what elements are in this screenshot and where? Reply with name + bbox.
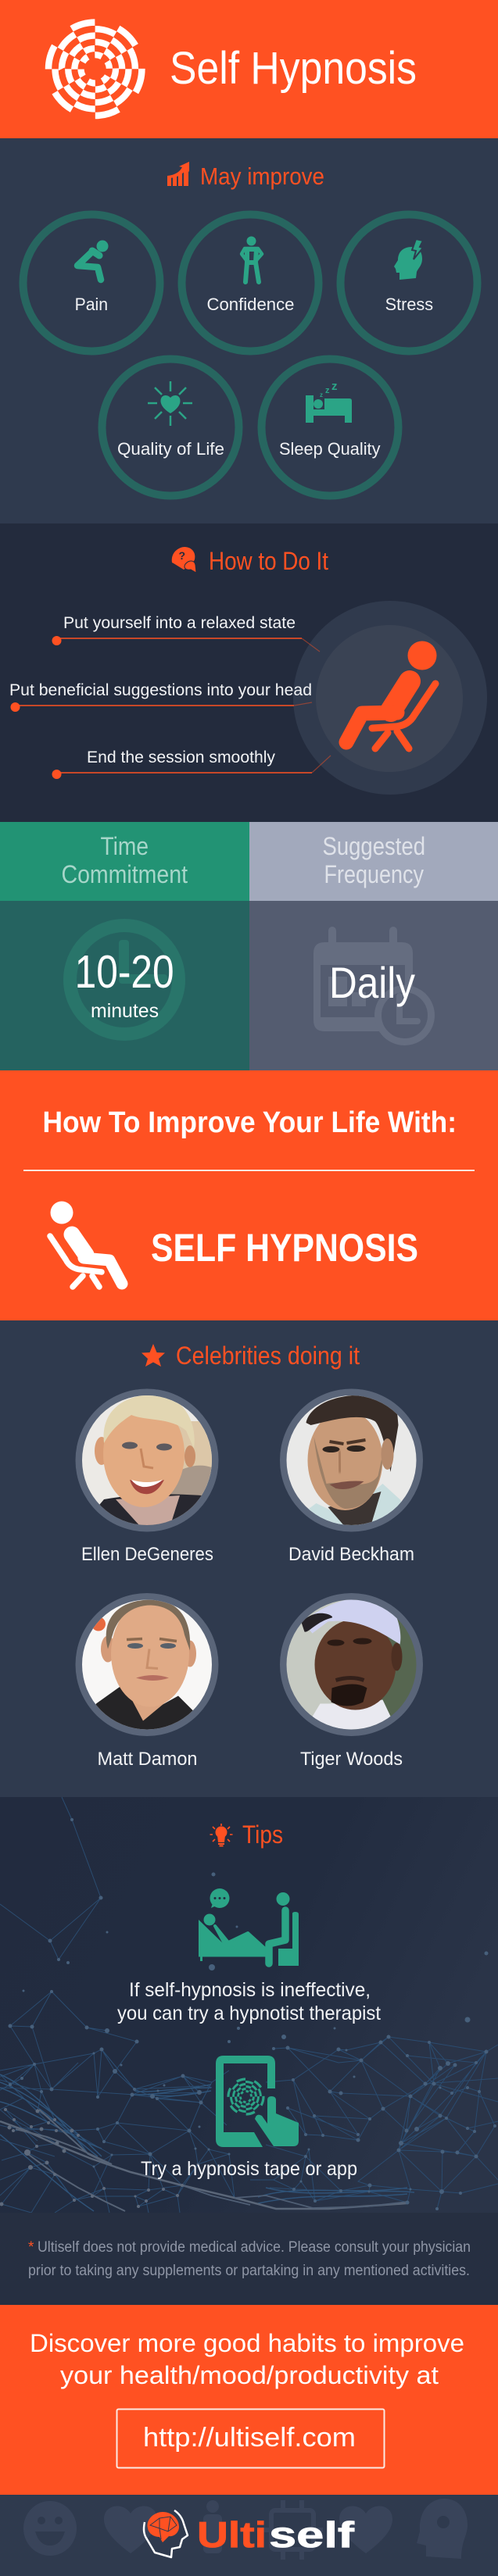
icon: person in pain (77, 241, 108, 280)
step 2: Put beneficial suggestions into your head (9, 681, 312, 699)
portrait: Tiger Woods (280, 1593, 423, 1736)
icon: faded clock (70, 925, 178, 1034)
icon: light bulb (210, 1824, 233, 1847)
banner title: SELF HYPNOSIS (151, 1226, 418, 1270)
name: Tiger Woods: Tiger Woods (300, 1749, 403, 1770)
step 1 (52, 614, 320, 652)
name: Matt Damon: Matt Damon (97, 1749, 197, 1770)
tip text: therapist: If self-hypnosis is ineffective, (129, 1979, 371, 2001)
panel: how to do it (0, 523, 498, 822)
card: pain (23, 214, 159, 352)
cta text: Discover more good habits to improve (30, 2329, 464, 2357)
disclaimer: prior to taking any supplements or partaking in any mentioned activities. (28, 2263, 470, 2279)
call to action (0, 2305, 498, 2495)
heading: suggested frequency (322, 832, 425, 888)
icon: therapist and patient (199, 1888, 299, 1966)
portrait: David Beckham (280, 1389, 423, 1531)
tip text: app: Try a hypnosis tape or app (141, 2158, 357, 2180)
illustration: seated relaxed figure (293, 601, 487, 795)
left mesh (0, 2049, 235, 2213)
icon: white relaxed figure (50, 1202, 122, 1287)
cta text: your health/mood/productivity at (60, 2361, 439, 2389)
panel: time commitment (0, 822, 249, 1070)
icon: question chat bubbles: ? (178, 549, 185, 562)
header band (0, 0, 498, 138)
icon: rising chart (167, 162, 189, 186)
panel: may improve (0, 138, 498, 523)
icon: faded calendar and clock (313, 927, 432, 1042)
logo: wordmark: Ulti (197, 2514, 267, 2555)
logo: wordmark: self (269, 2514, 355, 2555)
heading: how to do it: How to Do It (209, 547, 328, 575)
heading: time commitment: Commitment (61, 860, 188, 888)
icon: head with lightning (394, 239, 423, 280)
heading: suggested frequency: Suggested (322, 832, 425, 860)
card: quality of life (102, 359, 239, 495)
panel: celebrities (75, 1344, 423, 1769)
url button (117, 2410, 385, 2467)
label: pain: Pain (75, 295, 108, 314)
step 1: Put yourself into a relaxed state (63, 614, 296, 632)
name: Ellen DeGeneres: Ellen DeGeneres (81, 1544, 213, 1565)
icon: bed with sleeping person: z (320, 391, 323, 398)
card: stress (341, 214, 477, 352)
value: daily: Daily (329, 958, 415, 1007)
heading: tips: Tips (242, 1820, 283, 1849)
nodes (8, 1818, 496, 2210)
card: sleep quality (261, 359, 399, 495)
background network (0, 1797, 498, 2213)
heading: time commitment: Time (100, 832, 149, 860)
icon: bed with sleeping person: z (325, 386, 330, 395)
icon: confident person (242, 236, 262, 282)
heading: celebrities: Celebrities doing it (176, 1342, 360, 1370)
upper constellations (0, 1797, 137, 2097)
heading: time commitment (61, 832, 188, 888)
panel: suggested frequency (249, 822, 498, 1070)
label: sleep quality: Sleep Quality (279, 439, 380, 459)
banner heading: How To Improve Your Life With: (42, 1106, 457, 1139)
tip text: therapist: you can try a hypnotist therapist (117, 2003, 381, 2024)
step 3: End the session smoothly (87, 749, 276, 766)
footer watermark icons (23, 2499, 468, 2560)
banner: how to improve (0, 1070, 498, 1320)
icon: bed with sleeping person: z (331, 380, 338, 393)
heading: may improve: May improve (200, 163, 324, 190)
right mesh (250, 2037, 498, 2209)
heading: suggested frequency: Frequency (324, 860, 424, 888)
logo: brain icon (144, 2510, 188, 2557)
title: Self Hypnosis (170, 43, 417, 94)
url button: http://ultiself.com (143, 2423, 356, 2453)
dense ribbon strands (0, 2074, 414, 2211)
icon: question chat bubbles (172, 547, 196, 573)
card: confidence (181, 214, 319, 352)
step 2 (9, 681, 312, 712)
portrait: Matt Damon (75, 1593, 219, 1736)
icon: bed with sleeping person (306, 380, 352, 423)
label: confidence: Confidence (206, 295, 294, 314)
portrait: Ellen DeGeneres (75, 1389, 219, 1531)
disclaimer: * (28, 2239, 34, 2256)
icon: hypnosis spiral logo (48, 23, 142, 116)
label: quality of life: Quality of Life (117, 439, 224, 459)
icon: phone with hypnosis app (216, 2056, 299, 2147)
panel: tips (0, 1797, 498, 2213)
footer (0, 2495, 498, 2576)
disclaimer (0, 2213, 498, 2305)
icon: star (142, 1344, 165, 1367)
unit: minutes: minutes (91, 1000, 159, 1022)
step 3 (52, 749, 331, 779)
disclaimer: Ultiself does not provide medical advice. Please consult your physician (38, 2239, 471, 2256)
name: David Beckham: David Beckham (288, 1544, 414, 1565)
icon: glowing heart (148, 381, 192, 426)
label: stress: Stress (385, 295, 433, 314)
grey ribbon (0, 2121, 407, 2209)
value: 10-20: 10-20 (75, 946, 174, 998)
